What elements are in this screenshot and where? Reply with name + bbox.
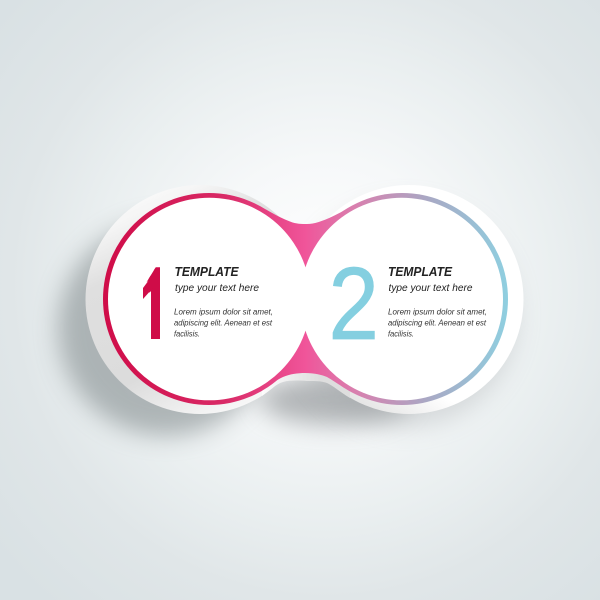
right text block — [388, 265, 487, 339]
right body: Lorem ipsum dolor sit amet, — [388, 306, 487, 316]
left white circle — [108, 198, 311, 400]
right white circle — [300, 198, 503, 400]
left subheading: type your text here — [175, 282, 259, 294]
right body — [388, 306, 487, 339]
right body: facilisis. — [388, 329, 414, 339]
drop shadows — [58, 203, 517, 436]
right heading: TEMPLATE — [388, 265, 453, 279]
left text block — [174, 265, 273, 339]
number 2: 2 — [328, 246, 379, 361]
right body: adipiscing elit. Aenean et est — [388, 318, 487, 328]
backing paper shape — [86, 185, 524, 414]
number 1 — [143, 267, 160, 339]
number 1: 1 — [126, 248, 182, 360]
left body: adipiscing elit. Aenean et est — [174, 318, 273, 328]
gradient ring with neck — [103, 193, 508, 405]
left body: Lorem ipsum dolor sit amet, — [174, 306, 273, 316]
right subheading: type your text here — [388, 282, 473, 294]
left body — [174, 306, 273, 339]
left heading: TEMPLATE — [174, 265, 239, 279]
left body: facilisis. — [174, 329, 200, 339]
